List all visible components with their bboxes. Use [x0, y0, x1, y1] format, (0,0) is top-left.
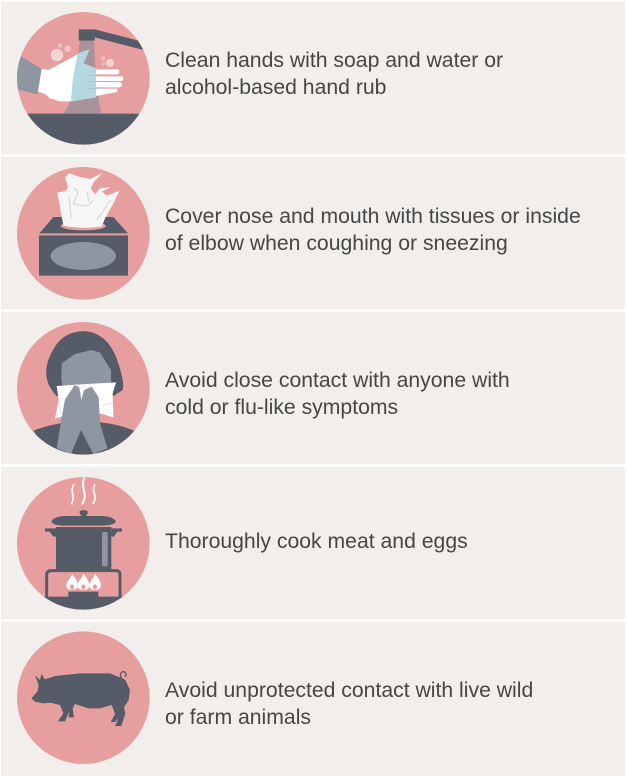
text: avoid close contact: Avoid close contact with anyone with: [165, 369, 510, 392]
icon: pig: [17, 631, 150, 764]
panel: clean hands: [1, 2, 625, 154]
text: cook thoroughly: Thoroughly cook meat and eggs: [165, 530, 468, 553]
text: clean hands: [165, 49, 503, 99]
panel: avoid close contact: [1, 312, 625, 464]
text: cover nose and mouth: of elbow when coughing or sneezing: [165, 232, 508, 255]
icons layer: [17, 12, 150, 764]
text: avoid close contact: cold or flu-like symptoms: [165, 396, 398, 419]
icon: hand washing: [17, 12, 150, 147]
icon: cooking pot: [17, 477, 150, 612]
text: avoid animals: or farm animals: [165, 706, 311, 729]
icon: tissue box: [17, 167, 150, 300]
panel: cover nose and mouth: [1, 157, 625, 309]
text: avoid animals: [165, 679, 533, 729]
icon: person with tissue: [17, 322, 150, 457]
text: cover nose and mouth: Cover nose and mouth with tissues or inside: [165, 205, 581, 228]
panel: avoid animals: [1, 622, 625, 776]
text: cover nose and mouth: [165, 205, 581, 255]
panel: cook meat and eggs: [1, 467, 625, 619]
text: avoid close contact: [165, 369, 510, 419]
text: clean hands: Clean hands with soap and water or: [165, 49, 503, 72]
text: avoid animals: Avoid unprotected contact with live wild: [165, 679, 533, 702]
text: clean hands: alcohol-based hand rub: [165, 76, 386, 99]
